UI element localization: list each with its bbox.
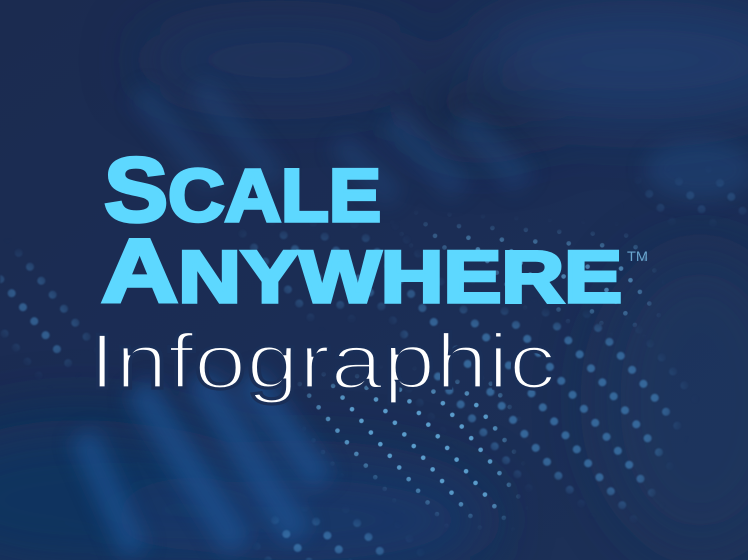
- subtitle: Infographic: Infographic: [89, 317, 556, 405]
- trademark symbol: TM: [627, 248, 648, 264]
- dot field: large soft dots: [0, 180, 746, 560]
- title: Scale Anywhere: [101, 140, 622, 322]
- title line: Scale: SCALE: [104, 140, 381, 241]
- blurred diagonal light bands: [70, 368, 334, 559]
- dot field: crisp dots: [298, 216, 659, 526]
- title line: Anywhere: ANYWHERE: [101, 222, 622, 322]
